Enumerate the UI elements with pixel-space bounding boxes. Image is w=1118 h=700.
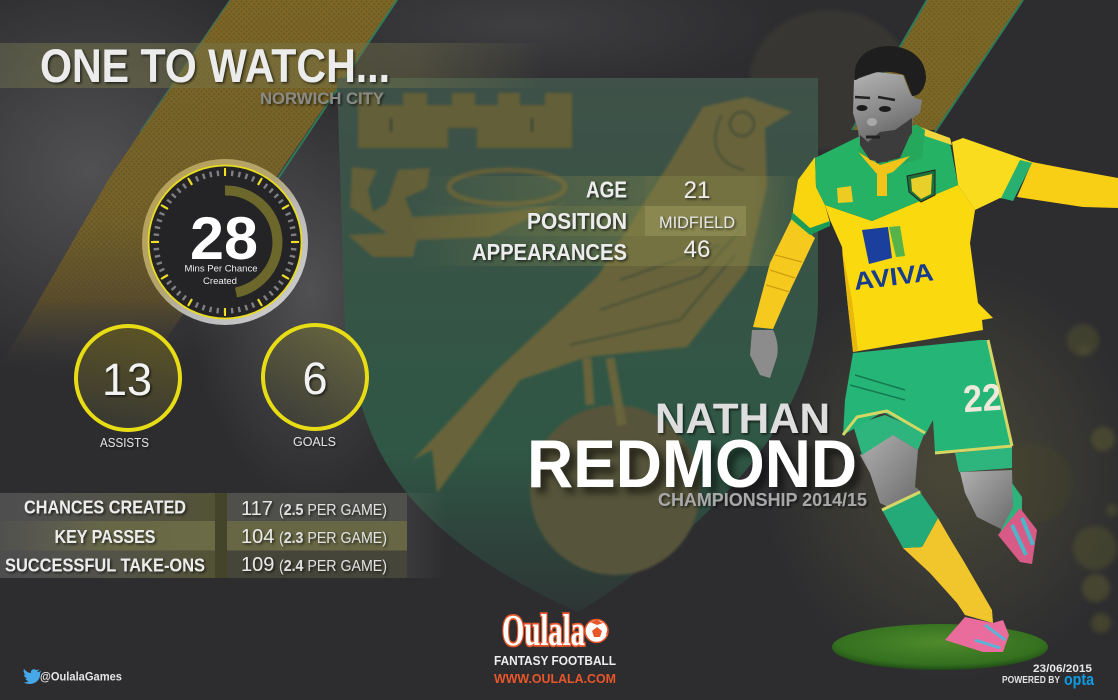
stat circle: goals: GOALS <box>293 435 336 449</box>
player figure <box>750 46 1118 670</box>
undershorts <box>853 415 925 455</box>
neck <box>862 125 915 168</box>
row: successful take-ons: (2.4 PER GAME) <box>279 558 387 575</box>
facial features <box>855 97 895 137</box>
date and data credit <box>1002 663 1094 689</box>
bokeh lights <box>993 324 1118 633</box>
player bio table <box>410 176 806 266</box>
beard <box>860 118 912 162</box>
twitter handle: @OulalaGames <box>40 670 122 684</box>
crest castle <box>358 93 572 148</box>
opta logo: opta <box>1064 670 1094 689</box>
row: position: POSITION <box>527 208 627 234</box>
collar <box>858 124 925 172</box>
row: key passes: KEY PASSES <box>54 527 156 547</box>
row: age: 21 <box>684 177 710 204</box>
surname: REDMOND <box>527 426 857 502</box>
row: appearances: APPEARANCES <box>472 239 627 265</box>
shorts <box>843 340 1012 453</box>
gauge major ticks <box>151 168 299 316</box>
row: key passes <box>54 526 387 548</box>
row: position: MIDFIELD <box>659 213 735 232</box>
row: chances created: CHANCES CREATED <box>24 498 186 518</box>
left cuff <box>791 212 830 235</box>
gauge: minutes per chance: Created <box>203 276 237 287</box>
crest ball <box>530 405 700 575</box>
sponsor name: AVIVA <box>852 258 935 296</box>
left forearm <box>753 218 815 329</box>
front boot <box>945 617 1009 652</box>
hand <box>750 330 778 378</box>
brand logo <box>494 606 616 686</box>
rear boot <box>998 508 1037 564</box>
logo ball <box>585 620 608 642</box>
player stats table <box>0 493 447 578</box>
subtitle: club: NORWICH CITY <box>260 90 384 108</box>
row: successful take-ons <box>5 554 387 576</box>
sock yellow <box>903 518 993 623</box>
diagonal gold stripes <box>0 0 1023 372</box>
right cuff <box>1001 160 1032 201</box>
left sleeve <box>793 157 830 234</box>
sponsor logo <box>862 227 892 264</box>
gauge arc <box>225 190 277 292</box>
stat circle: goals <box>263 325 367 449</box>
stat circle: assists: 13 <box>102 354 152 405</box>
competition: CHAMPIONSHIP 2014/15 <box>658 490 867 510</box>
gauge value: 28 <box>190 205 258 272</box>
crest shield <box>337 78 818 612</box>
player name <box>527 395 867 510</box>
gauge minor ticks <box>156 173 294 311</box>
row: key passes: (2.3 PER GAME) <box>279 530 387 547</box>
shoulder stripe <box>920 127 952 145</box>
row: appearances <box>472 236 710 265</box>
date and data credit: POWERED BY <box>1002 675 1060 686</box>
stat circle: goals: 6 <box>302 353 328 404</box>
row: chances created <box>24 498 387 520</box>
crest motifs <box>348 93 792 575</box>
date and data credit: 23/06/2015 <box>1033 663 1092 675</box>
kit maker logo <box>837 186 853 203</box>
first name: NATHAN <box>655 395 830 443</box>
crest lion <box>348 167 567 257</box>
row: chances created: (2.5 PER GAME) <box>279 502 387 519</box>
stat circle: assists <box>76 326 180 450</box>
logo tagline: FANTASY FOOTBALL <box>494 653 616 668</box>
title: ONE TO WATCH... <box>40 39 390 92</box>
row: chances created: 117 <box>241 498 273 520</box>
crest canary <box>413 97 792 493</box>
face <box>853 72 922 162</box>
stat circle: assists: ASSISTS <box>100 436 149 450</box>
shirt yoke <box>815 125 958 221</box>
rear leg <box>960 470 1013 530</box>
logo wordmark: Oulala <box>502 606 585 655</box>
shorts number: 22 <box>962 377 1003 421</box>
rear sock <box>1000 483 1022 532</box>
hair <box>855 46 926 96</box>
title band <box>0 43 545 88</box>
row: successful take-ons: SUCCESSFUL TAKE-ONS <box>5 556 205 576</box>
front leg <box>860 435 922 508</box>
icon: twitter bird <box>23 669 41 684</box>
sock green <box>882 492 938 548</box>
club crest on shirt <box>907 170 935 202</box>
gauge label: Mins Per Chance <box>184 264 258 274</box>
row: age: AGE <box>586 176 627 202</box>
row: key passes: 104 <box>241 526 274 548</box>
row: successful take-ons: 109 <box>241 554 274 576</box>
gauge: minutes per chance <box>142 159 308 325</box>
background club crest <box>337 78 818 612</box>
row: appearances: 46 <box>684 236 710 263</box>
right arm <box>1017 162 1118 208</box>
grass base <box>832 624 1048 670</box>
shirt body <box>825 185 993 352</box>
right sleeve <box>952 138 1032 210</box>
row: age <box>586 176 710 204</box>
logo url: WWW.OULALA.COM <box>494 671 616 686</box>
row: position <box>527 208 735 234</box>
